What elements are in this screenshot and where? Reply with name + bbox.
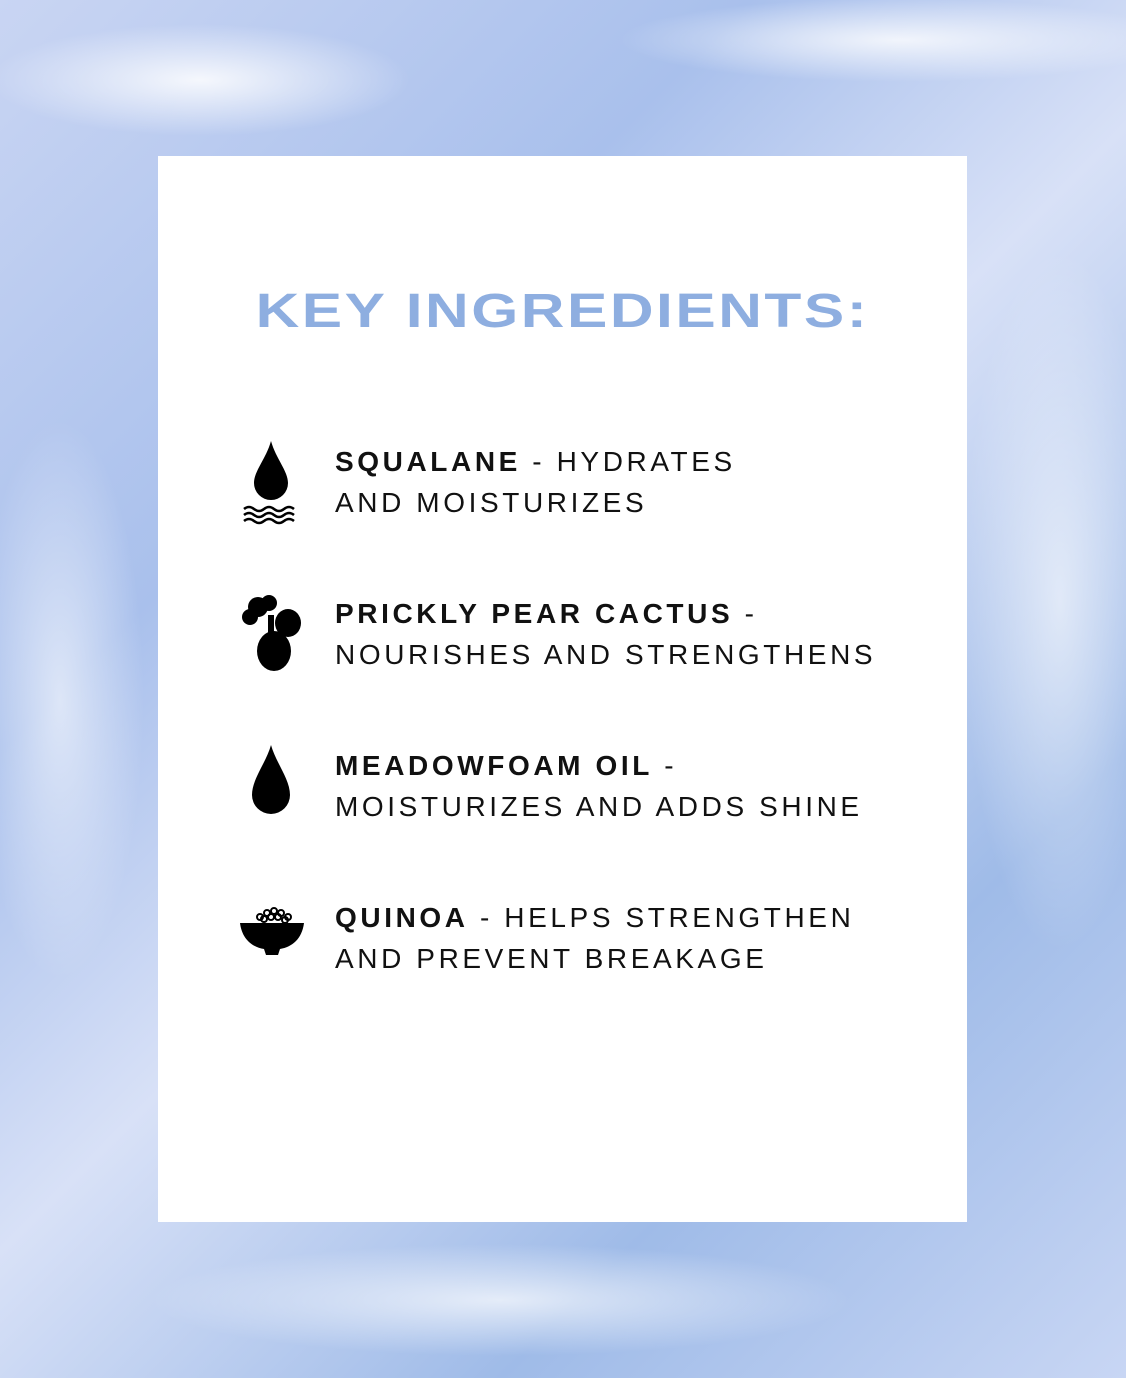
item: quinoa: AND PREVENT BREAKAGE — [335, 943, 767, 974]
icon: drop with waves — [243, 441, 295, 524]
icon: drop — [252, 745, 290, 814]
item: prickly pear: NOURISHES AND STRENGTHENS — [335, 639, 876, 670]
item: prickly pear — [242, 595, 876, 671]
item: prickly pear: PRICKLY PEAR CACTUS - — [335, 598, 758, 629]
text: SQUALANE - HYDRATES — [335, 446, 736, 477]
item: meadowfoam: MEADOWFOAM OIL - — [335, 750, 677, 781]
text — [335, 446, 736, 518]
icon: cactus — [242, 595, 301, 671]
text: AND MOISTURIZES — [335, 487, 647, 518]
item: quinoa — [240, 902, 854, 974]
title: KEY INGREDIENTS: — [256, 285, 869, 338]
icon: bowl — [240, 907, 304, 955]
item: meadowfoam — [252, 745, 863, 822]
item: squalane — [243, 441, 736, 524]
item: meadowfoam: MOISTURIZES AND ADDS SHINE — [335, 791, 863, 822]
item: quinoa: QUINOA - HELPS STRENGTHEN — [335, 902, 854, 933]
panel: white card — [158, 156, 967, 1222]
